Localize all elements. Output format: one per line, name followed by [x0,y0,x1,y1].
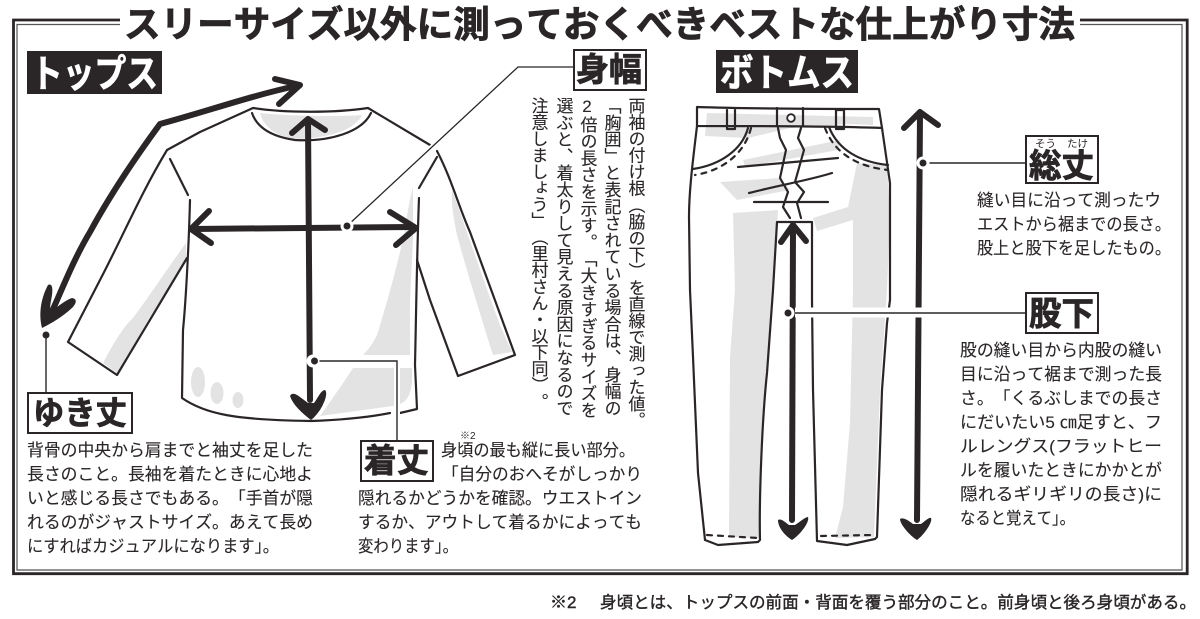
text: mihaba vertical description [528,97,645,428]
heading: tops: トップス [31,54,158,96]
sweater shading [103,113,512,416]
footnote: 身頃とは、トップスの前面・背面を覆う部分のこと。前身頃と後ろ身頃がある。 [600,593,1196,612]
text: sotake description: 股上と股下を足したもの。 [977,239,1171,258]
text: sotake description: エストから裾までの長さ。 [977,215,1171,234]
illustration: pants [689,107,890,545]
text: kitake description: 身頃の最も縦に長い部分。 [441,441,635,460]
text: mihaba vertical description: 注意しましょう」（里村さん・以下同）。 [528,97,548,410]
text: mihaba vertical description: 選ぶと、着太りして見える原因になるので [554,97,573,416]
pants outline [689,107,890,545]
text: matashita description: ルレングス(フラットヒー [960,437,1162,456]
text: kitake description: 変わります」。 [358,537,458,556]
label: yuki-take: ゆき丈 [33,395,127,431]
label: sotake: 総丈 [1029,147,1094,184]
leader: kitake [306,354,397,440]
leader: mihaba [340,67,574,232]
text: matashita description [960,341,1162,528]
text: yuki-take description: れるのがジャストサイズ。あえて長め [27,513,313,532]
text: matashita description: ルを履いたときにかかとが [960,461,1162,480]
label: kitake: 着丈 [364,442,429,479]
text: mihaba vertical description: 両袖の付け根（脇の下）を直線で測った値。 [626,97,645,428]
text: kitake description: ※2 [460,431,476,442]
text: yuki-take description: 背骨の中央から肩までと袖丈を足した [27,441,313,460]
text: sotake description: 縫い目に沿って測ったウ [977,191,1161,210]
title: スリーサイズ以外に測っておくべきベストな仕上がり寸法 [124,4,1075,45]
label: mihaba: 身幅 [576,51,642,88]
text: matashita description: 隠れるギリギリの長さ)に [960,485,1162,504]
text: matashita description: なると覚えて」。 [960,509,1075,528]
label: matashita: 股下 [1029,295,1094,332]
text: yuki-take description: にすればカジュアルになります」。 [27,537,279,556]
leader: yuki [42,332,50,392]
illustration: sweater [68,108,515,421]
heading: bottoms: ボトムス [720,53,854,95]
text: yuki-take description: いと感じる長さでもある。「手首が隠 [27,489,313,508]
arrow: chest width (mihaba) [191,211,416,245]
text: mihaba vertical description: 「胸囲」と表記されている場合は、身幅の [602,97,621,416]
text: yuki-take description: 長さのこと。長袖を着たときに心地よ [27,465,313,484]
pants shading [705,113,890,538]
text: mihaba vertical description: 2倍の長さを示す。「大きすぎるサイズを [578,97,597,418]
text: kitake description: 「自分のおへそがしっかり [442,465,642,484]
leader: total length [916,156,1026,170]
text: matashita description: さ。「くるぶしまでの長さ [960,389,1162,408]
arrow: body length (kitake) [290,119,326,420]
label: sotake: たけ [1067,138,1088,150]
arrow: total length [900,112,938,540]
text: kitake description [358,431,642,556]
leader: inseam [782,306,1026,320]
label: sotake: そう [1035,138,1056,150]
text: yuki-take description [27,441,313,556]
arrow: sleeve length (yuki) [40,79,300,328]
text: sotake description [977,191,1171,258]
text: kitake description: 隠れるかどうかを確認。ウエストイン [358,489,642,508]
footnote: ※2 [550,593,576,612]
text: matashita description: 目に沿って裾まで測った長 [960,365,1162,384]
text: kitake description: するか、アウトして着るかによっても [358,513,642,532]
text: matashita description: にだいたい5 ㎝足すと、フ [960,413,1162,432]
text: matashita description: 股の縫い目から内股の縫い [960,341,1162,360]
arrow: inseam [778,225,808,540]
sweater outline [68,108,515,421]
